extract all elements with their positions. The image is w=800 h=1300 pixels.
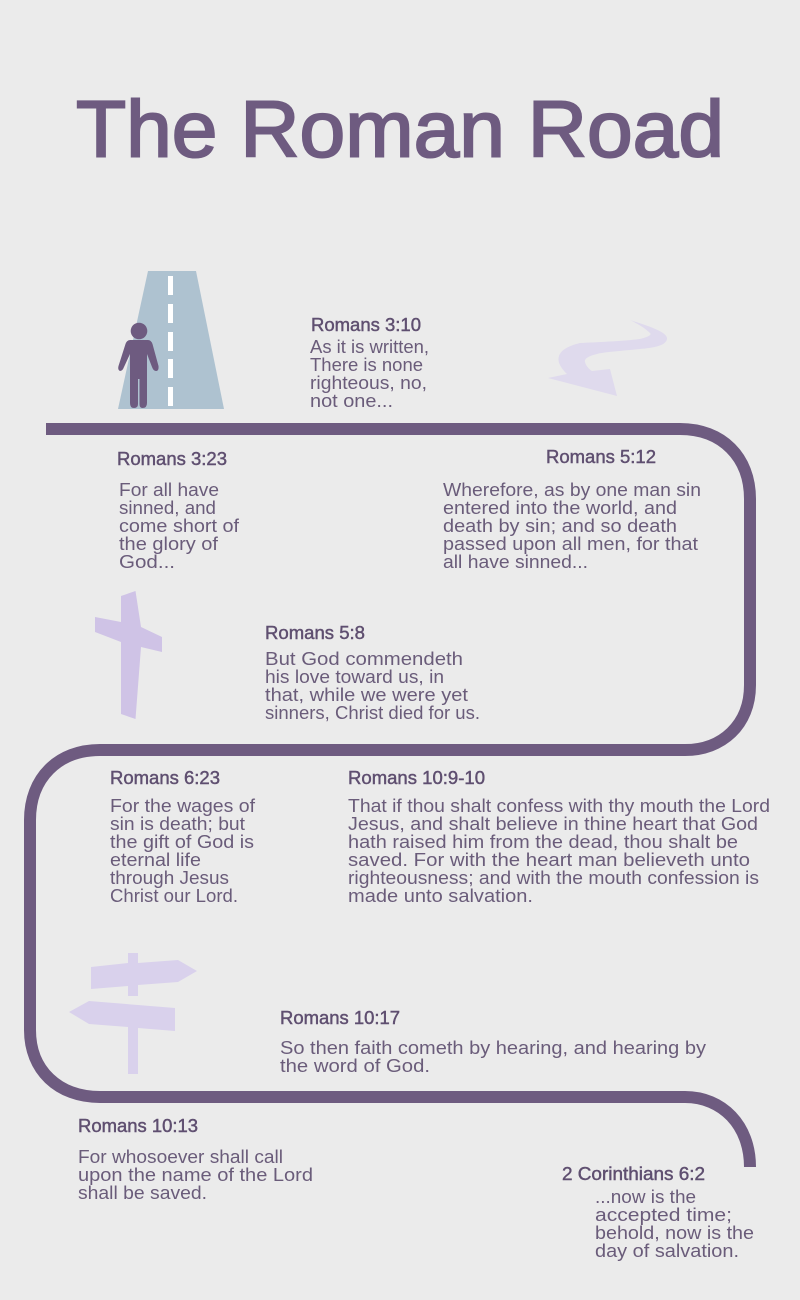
heading: Romans 10:17: Romans 10:17 [280,1008,400,1028]
text: Romans 5:8 verse: his love toward us, in [265,666,444,687]
text: Romans 10:9-10 verse: made unto salvation. [348,885,533,906]
title: The Roman Road [76,84,724,174]
text: Romans 5:12 verse: all have sinned... [443,551,588,572]
text: Romans 3:10 verse: As it is written, [310,336,429,357]
text: Romans 3:10 verse: There is none [310,354,423,375]
text: 2 Corinthians 6:2 verse: behold, now is the [595,1222,754,1243]
text: Romans 5:12 verse: entered into the world, and [443,497,677,518]
text: Romans 10:9-10 verse [348,795,770,906]
icon: road with person [118,271,224,409]
text: Romans 10:17 verse: So then faith cometh by hearing, and hearing by [280,1037,707,1058]
heading: Romans 10:13: Romans 10:13 [78,1116,198,1136]
text: 2 Corinthians 6:2 verse: ...now is the [595,1186,696,1207]
text: Romans 5:12 verse: death by sin; and so death [443,515,677,536]
text: Romans 5:12 verse: Wherefore, as by one man sin [443,479,701,500]
heading: 2 Corinthians 6:2: 2 Corinthians 6:2 [562,1164,705,1184]
text: Romans 3:10 verse: righteous, no, [310,372,427,393]
text: Romans 5:8 verse: But God commendeth [265,648,463,669]
text: 2 Corinthians 6:2 verse: day of salvation. [595,1240,739,1261]
text: Romans 3:23 verse: sinned, and [119,497,216,518]
text: Romans 3:23 verse: come short of [119,515,240,536]
text: Romans 10:9-10 verse: saved. For with the heart man believeth unto [348,849,750,870]
text: Romans 3:23 verse: the glory of [119,533,219,554]
text: 2 Corinthians 6:2 verse [595,1186,754,1261]
text: Romans 6:23 verse: Christ our Lord. [110,885,238,906]
text: Romans 6:23 verse: the gift of God is [110,831,254,852]
text: Romans 10:17 verse: the word of God. [280,1055,430,1076]
text: Romans 3:23 verse: For all have [119,479,219,500]
text: Romans 5:8 verse: that, while we were yet [265,684,468,705]
text: Romans 3:10 verse: not one... [310,390,393,411]
text: Romans 10:13 verse: shall be saved. [78,1182,207,1203]
heading: Romans 5:8: Romans 5:8 [265,623,365,643]
text: Romans 10:9-10 verse: That if thou shalt confess with thy mouth the Lord [348,795,770,816]
heading: Romans 3:10: Romans 3:10 [311,315,421,335]
text: Romans 3:10 verse [310,336,429,411]
text: Romans 10:13 verse: For whosoever shall call [78,1146,283,1167]
heading: Romans 5:12: Romans 5:12 [546,447,656,467]
text: Romans 3:23 verse: God... [119,551,175,572]
text: Romans 10:9-10 verse: righteousness; and with the mouth confession is [348,867,759,888]
text: Romans 5:12 verse: passed upon all men, for that [443,533,698,554]
icon: cross [95,591,162,719]
text: Romans 6:23 verse: sin is death; but [110,813,245,834]
text: Romans 10:13 verse: upon the name of the Lord [78,1164,313,1185]
icon: winding arrow [548,320,667,396]
text: Romans 10:9-10 verse: Jesus, and shalt believe in thine heart that God [348,813,758,834]
text: Romans 3:23 verse [119,479,240,572]
text: Romans 10:17 verse [280,1037,707,1076]
heading: Romans 3:23: Romans 3:23 [117,449,227,469]
heading: Romans 10:9-10: Romans 10:9-10 [348,768,485,788]
text: 2 Corinthians 6:2 verse: accepted time; [595,1204,732,1225]
text: Romans 6:23 verse: through Jesus [110,867,229,888]
heading: Romans 6:23: Romans 6:23 [110,768,220,788]
text: Romans 6:23 verse [110,795,256,906]
text: Romans 5:8 verse: sinners, Christ died for us. [265,702,480,723]
icon: signpost [69,953,197,1074]
text: Romans 10:13 verse [78,1146,313,1203]
text: Romans 6:23 verse: eternal life [110,849,201,870]
text: Romans 10:9-10 verse: hath raised him from the dead, thou shalt be [348,831,738,852]
text: Romans 6:23 verse: For the wages of [110,795,256,816]
text: Romans 5:12 verse [443,479,701,572]
winding road line [30,429,750,1167]
text: Romans 5:8 verse [265,648,480,723]
